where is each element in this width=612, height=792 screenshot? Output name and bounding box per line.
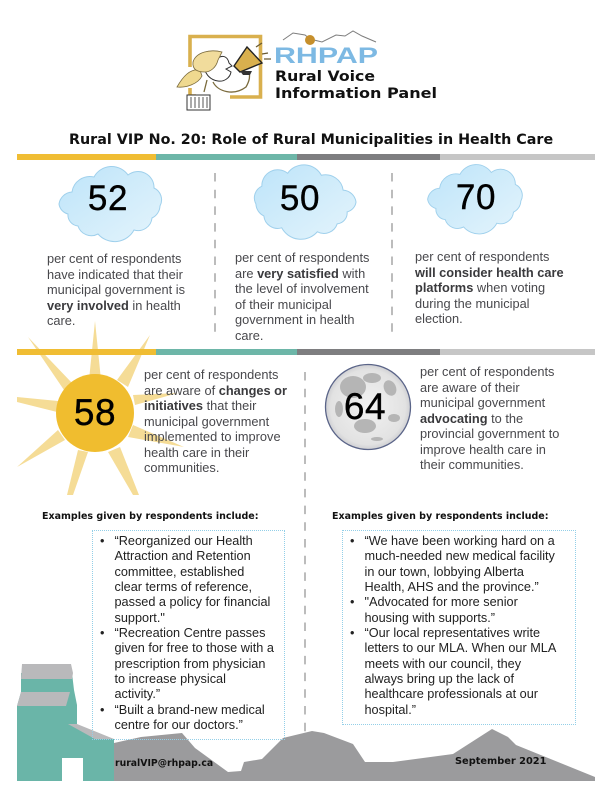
quotes right: • [350, 626, 354, 640]
text 58: municipal government [144, 414, 269, 428]
panel: examples left [92, 530, 285, 740]
text 52: very involved in health [47, 298, 181, 312]
panel: examples left: committee, established [114, 565, 244, 579]
panel: examples left: Attraction and Retention [114, 549, 251, 563]
quotes right: • [350, 595, 354, 609]
panel: examples left: given for free to those with a [114, 641, 274, 655]
text 58: communities. [144, 460, 219, 475]
text 50: government in health [235, 312, 355, 327]
text 58: initiatives that their [144, 398, 256, 413]
icon: gold frame [190, 36, 260, 97]
quotes left [100, 534, 104, 717]
text 58: are aware of changes or [144, 382, 287, 398]
panel: examples right: “Our local representatives write [364, 626, 540, 640]
panel: examples right: "Advocated for more senior [364, 595, 518, 609]
panel: examples left: “Recreation Centre passes [114, 626, 265, 640]
text 58: per cent of respondents [144, 367, 278, 382]
text 70 [415, 249, 564, 326]
text 52 [47, 251, 185, 328]
panel: examples left: to increase physical [114, 672, 226, 686]
icon: cloud 70 [427, 164, 523, 234]
panel: examples right: in our town, lobbying Alberta [364, 565, 524, 579]
text 58 [144, 367, 287, 475]
panel: examples left: “Reorganized our Health [114, 534, 253, 548]
panel: examples left: “Built a brand-new medical [114, 703, 265, 717]
panel: examples left: support." [114, 611, 165, 625]
contact email: ruralVIP@rhpap.ca [115, 758, 213, 769]
panel: examples right: much-needed new medical facility [364, 549, 555, 563]
icon: cloud 52 [58, 166, 162, 242]
text 50: the level of involvement [235, 281, 369, 296]
logo: Rural Voice Information Panel [176, 30, 437, 110]
panel: examples right: Health, AHS and the province.” [364, 580, 539, 594]
text 64: their communities. [420, 457, 524, 472]
icon: mountain line and sun [283, 31, 376, 42]
text 64: advocating to the [420, 410, 523, 426]
panel: examples right: meets with our council, they [364, 657, 521, 671]
quotes left: • [100, 703, 104, 717]
quotes right: • [350, 534, 354, 548]
text 50: are very satisfied with [235, 266, 365, 280]
text 70: per cent of respondents [415, 249, 549, 264]
text 64: improve health care in [420, 442, 546, 456]
panel: examples right: “We have been working hard on a [364, 534, 555, 548]
quotes right [350, 534, 354, 640]
panel: examples right [342, 530, 576, 725]
panel: examples left: prescription from physician [114, 657, 265, 671]
icon: sun [17, 322, 184, 495]
text 58: health care in their [144, 444, 249, 460]
number 70: 70 [456, 178, 496, 217]
text 52: have indicated that their [47, 266, 183, 282]
panel: stat 64 moon [324, 364, 559, 472]
text 70: during the municipal [415, 296, 530, 310]
panel: examples left: clear terms of reference, [114, 580, 252, 594]
icon: cloud 50 [254, 164, 356, 240]
panel: examples right: housing with supports.” [364, 611, 495, 625]
second colour bar [17, 349, 595, 355]
panel: stat 52 [47, 166, 185, 328]
text 50: of their municipal [235, 296, 332, 312]
text 70: platforms when voting [415, 280, 545, 295]
text 50: per cent of respondents [235, 250, 369, 265]
text 58: implemented to improve [144, 429, 281, 444]
number 58: 58 [74, 392, 116, 433]
panel: examples right: letters to our MLA. When our MLA [364, 641, 556, 655]
quotes left: • [100, 534, 104, 548]
text 52: care. [47, 313, 75, 328]
number 52: 52 [88, 179, 128, 218]
panel: examples left: passed a policy for financial [114, 595, 270, 609]
text 70: election. [415, 311, 463, 326]
panel: stat 58 sun [17, 322, 287, 495]
text 70: will consider health care [415, 264, 564, 280]
icon: person with megaphone [177, 43, 271, 110]
icon: moon [324, 364, 412, 450]
text 52: per cent of respondents [47, 251, 181, 266]
text 52: municipal government is [47, 282, 185, 297]
text 64: municipal government [420, 395, 545, 410]
quotes left: • [100, 626, 104, 640]
panel: examples left: activity.” [114, 687, 160, 701]
panel: examples right: hospital.” [364, 703, 416, 717]
text 64: are aware of their [420, 380, 520, 394]
panel: examples right: healthcare professionals at our [364, 687, 538, 701]
logo: Rural Voice Information Panel: Information Panel [275, 86, 437, 102]
heading: examples left: Examples given by respondents include: [42, 511, 259, 522]
heading: examples right: Examples given by respondents include: [332, 511, 549, 522]
text 64: per cent of respondents [420, 364, 554, 379]
number 50: 50 [280, 179, 320, 218]
logo: Rural Voice Information Panel: Rural Voice [275, 69, 375, 85]
title: Rural VIP No. 20: Role of Rural Municipalities in Health Care [69, 132, 553, 148]
top colour bar [17, 154, 595, 160]
text 64: provincial government to [420, 426, 559, 441]
panel: stat 70 [415, 164, 564, 326]
panel: examples left: centre for our doctors.” [114, 718, 243, 732]
date: September 2021 [455, 756, 546, 767]
text 50: care. [235, 328, 263, 342]
logo wordmark: RHPAP [274, 43, 378, 68]
panel: stat 50 [235, 164, 369, 342]
text 64 [420, 364, 559, 472]
number 64: 64 [344, 386, 386, 427]
illustration: grain elevator [17, 664, 114, 781]
text 50 [235, 250, 369, 342]
panel: examples right: always bring up the lack of [364, 672, 514, 686]
illustration: mountains [114, 729, 595, 781]
